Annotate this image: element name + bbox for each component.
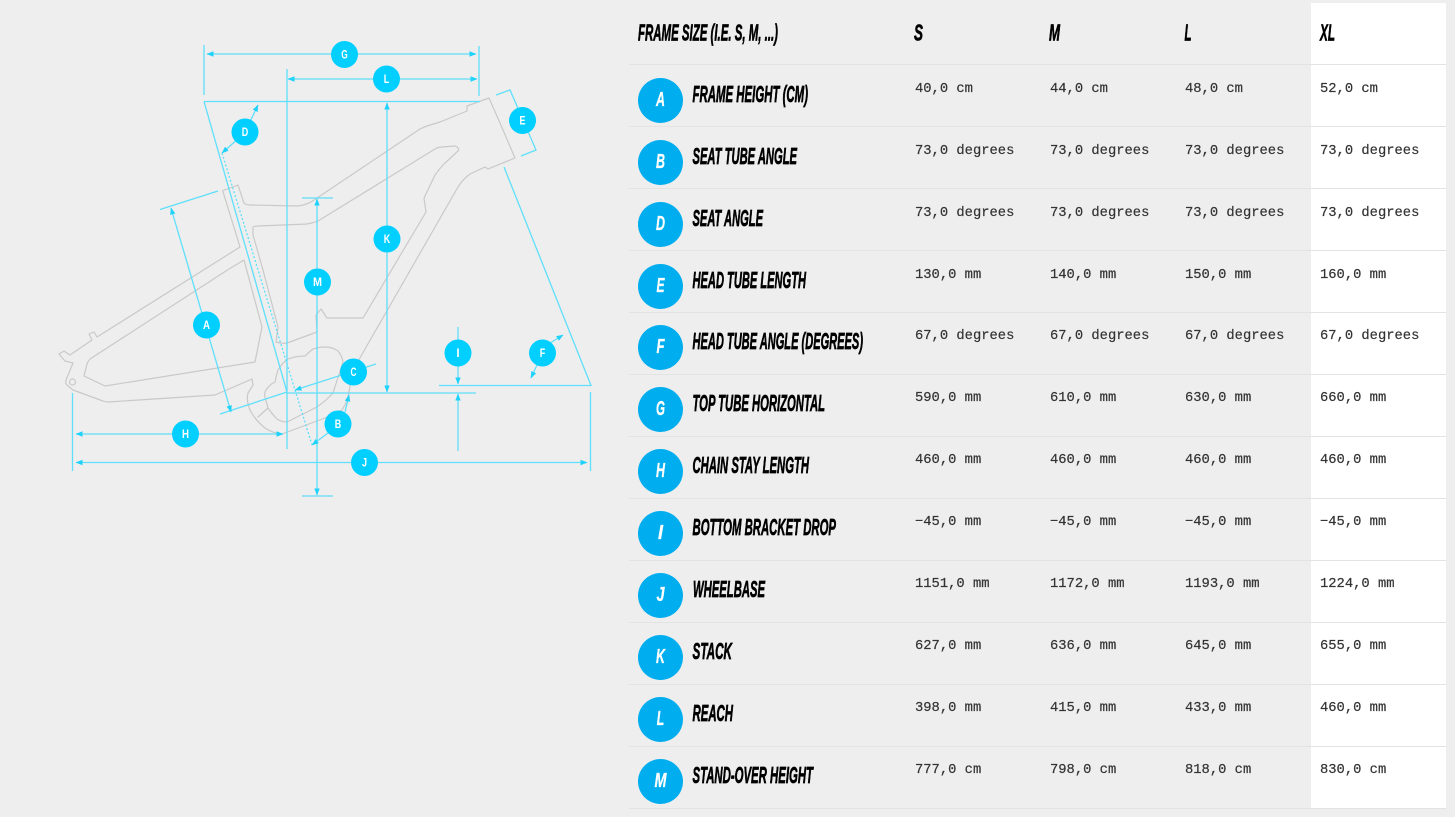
row J: wheelbase: 1193,0 mm [1185,577,1260,592]
diagram marker F: F [540,348,545,360]
row M: stand-over height: M [654,770,667,792]
row H: chain stay length [638,449,1386,494]
diagram marker L [373,66,400,92]
row A: frame height: 40,0 cm [915,82,973,97]
row E: head tube length: 160,0 mm [1320,268,1386,283]
row B: seat tube angle: 73,0 degrees [1185,143,1284,159]
table header row [638,20,1335,46]
diagram marker I [444,340,472,366]
row D: seat angle [638,202,1419,247]
row F: head tube angle: F [656,336,665,358]
size table [629,20,1446,808]
row I: bottom bracket drop: −45,0 mm [1185,515,1251,530]
row K: stack: K [656,646,666,668]
row L: reach: 398,0 mm [915,701,981,716]
row H: chain stay length: 460,0 mm [915,453,981,468]
row B: seat tube angle: 73,0 degrees [915,143,1014,159]
row A: frame height: A [655,89,665,111]
diagram marker H [172,420,199,448]
row J: wheelbase: 1172,0 mm [1050,577,1125,592]
diagram marker F [529,340,556,366]
row H: chain stay length: CHAIN STAY LENGTH [692,452,809,478]
row G: top tube horizontal: 610,0 mm [1050,391,1116,406]
row M: stand-over height: 798,0 cm [1050,763,1116,778]
row K: stack: 627,0 mm [915,639,981,654]
row L: reach: L [657,708,664,730]
bike frame outline [59,98,515,434]
diagram marker L: L [384,74,389,86]
diagram marker H: H [182,429,189,441]
row D: seat angle: SEAT ANGLE [692,205,763,231]
highlighted XL column background [1311,3,1446,808]
row F: head tube angle: 67,0 degrees [1050,328,1149,344]
row E: head tube length: 140,0 mm [1050,268,1116,283]
diagram marker M: M [313,277,322,289]
row K: stack: 636,0 mm [1050,639,1116,654]
diagram marker C: C [350,367,356,379]
row I: bottom bracket drop: I [658,522,663,544]
diagram marker M [304,268,331,296]
row M: stand-over height: 830,0 cm [1320,763,1386,778]
row L: reach: REACH [692,700,733,726]
row E: head tube length: HEAD TUBE LENGTH [692,267,806,293]
row K: stack: 655,0 mm [1320,639,1386,654]
row E: head tube length: 150,0 mm [1185,268,1251,283]
diagram marker I: I [456,348,460,360]
row G: top tube horizontal: 630,0 mm [1185,391,1251,406]
diagram marker A [193,312,220,338]
diagram marker E: E [520,116,526,128]
row H: chain stay length: 460,0 mm [1185,453,1251,468]
row D: seat angle: D [656,213,665,235]
table header row: FRAME SIZE (I.E. S, M, ...) [638,20,778,46]
row E: head tube length [638,264,1386,309]
table header row: M [1049,20,1060,46]
row M: stand-over height: 777,0 cm [915,763,981,778]
row E: head tube length: E [656,275,665,297]
row D: seat angle: 73,0 degrees [915,205,1014,221]
row G: top tube horizontal: G [656,398,665,420]
row L: reach [638,697,1386,742]
diagram marker C [340,358,367,386]
row I: bottom bracket drop: BOTTOM BRACKET DROP [692,514,836,540]
row L: reach: 433,0 mm [1185,701,1251,716]
row A: frame height: 48,0 cm [1185,82,1243,97]
diagram marker A: A [203,320,210,332]
row J: wheelbase: J [656,584,665,606]
table header row: S [914,20,923,46]
row A: frame height: 52,0 cm [1320,82,1378,97]
row G: top tube horizontal: 590,0 mm [915,391,981,406]
diagram marker J: J [362,458,367,470]
row D: seat angle: 73,0 degrees [1050,205,1149,221]
row J: wheelbase: 1151,0 mm [915,577,990,592]
row E: head tube length: 130,0 mm [915,268,981,283]
row L: reach: 415,0 mm [1050,701,1116,716]
table header row: L [1184,20,1192,46]
row I: bottom bracket drop [638,511,1386,556]
diagram marker G: G [341,50,348,62]
diagram marker G [331,41,358,68]
size table: XL [1319,20,1335,46]
frame geometry diagram [59,41,591,496]
row J: wheelbase [638,573,1395,618]
row D: seat angle: 73,0 degrees [1320,205,1419,221]
diagram marker D: D [242,127,248,139]
row F: head tube angle [638,325,1419,370]
row B: seat tube angle [638,140,1419,185]
row J: wheelbase: 1224,0 mm [1320,577,1395,592]
row I: bottom bracket drop: −45,0 mm [1320,515,1386,530]
diagram marker B [324,410,352,438]
row M: stand-over height [638,759,1386,804]
row K: stack [638,635,1386,680]
row A: frame height [638,78,1378,123]
diagram marker E [509,107,536,134]
row G: top tube horizontal [638,387,1386,432]
row H: chain stay length: 460,0 mm [1320,453,1386,468]
row F: head tube angle: 67,0 degrees [915,328,1014,344]
diagram marker B: B [335,419,341,431]
row J: wheelbase: WHEELBASE [693,576,765,602]
row D: seat angle: 73,0 degrees [1185,205,1284,221]
row I: bottom bracket drop: −45,0 mm [915,515,981,530]
row H: chain stay length: 460,0 mm [1050,453,1116,468]
row B: seat tube angle: SEAT TUBE ANGLE [692,143,797,169]
row B: seat tube angle: 73,0 degrees [1320,143,1419,159]
row M: stand-over height: 818,0 cm [1185,763,1251,778]
row F: head tube angle: 67,0 degrees [1320,328,1419,344]
row A: frame height: 44,0 cm [1050,82,1108,97]
row F: head tube angle: HEAD TUBE ANGLE (DEGREES) [692,328,863,354]
row A: frame height: FRAME HEIGHT (CM) [692,81,808,107]
diagram marker K: K [384,234,391,246]
row G: top tube horizontal: TOP TUBE HORIZONTAL [692,390,825,416]
row F: head tube angle: 67,0 degrees [1185,328,1284,344]
row G: top tube horizontal: 660,0 mm [1320,391,1386,406]
diagram marker D [232,118,258,146]
row H: chain stay length: H [656,460,665,482]
row M: stand-over height: STAND-OVER HEIGHT [692,762,814,788]
diagram marker K [374,226,400,252]
row K: stack: 645,0 mm [1185,639,1251,654]
row L: reach: 460,0 mm [1320,701,1386,716]
row I: bottom bracket drop: −45,0 mm [1050,515,1116,530]
dimension lines [72,45,591,496]
diagram marker J [351,449,378,476]
row B: seat tube angle: B [656,151,665,173]
row B: seat tube angle: 73,0 degrees [1050,143,1149,159]
row K: stack: STACK [692,638,733,664]
